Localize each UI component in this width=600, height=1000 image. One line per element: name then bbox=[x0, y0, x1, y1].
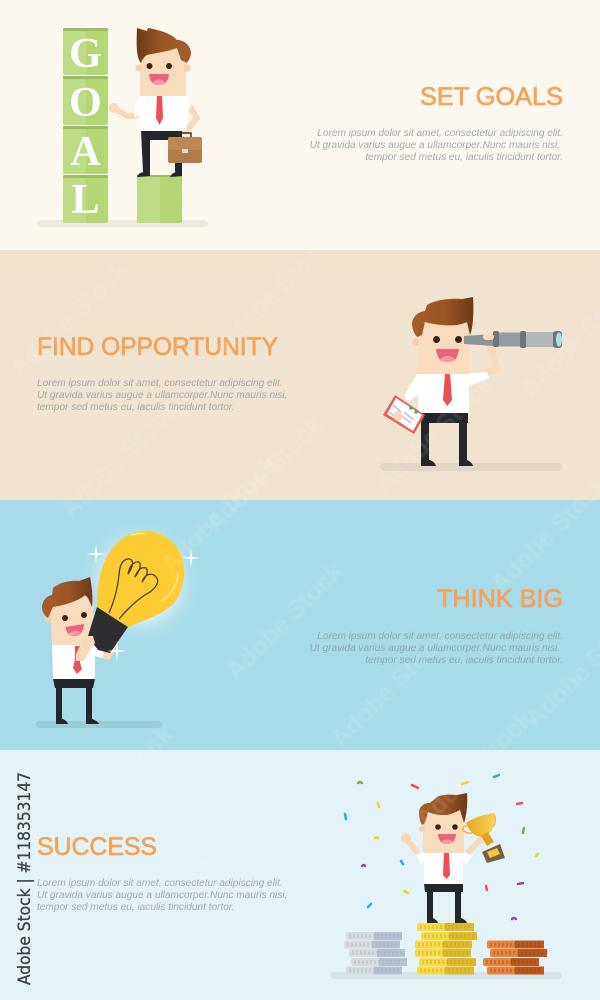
legs and shoes bbox=[137, 130, 182, 177]
illustration: businessman with trophy on coins bbox=[401, 793, 505, 923]
panel: find opportunity background bbox=[0, 250, 600, 500]
legs and shoes bbox=[53, 679, 99, 724]
head bbox=[412, 322, 469, 374]
hand on spyglass bbox=[483, 334, 494, 340]
heading: set goals: SET GOALS bbox=[420, 83, 563, 111]
text block: think big description: tempor sed metus eu, iaculis tincidunt tortor. bbox=[365, 655, 563, 666]
text block: success description: tempor sed metus eu, iaculis tincidunt tortor. bbox=[37, 902, 235, 913]
raised arm bbox=[470, 338, 497, 377]
bulb glass bbox=[97, 531, 184, 627]
block G: G bbox=[69, 31, 102, 77]
stock watermarks: Adobe Stock bbox=[325, 625, 453, 753]
bulb highlights bbox=[131, 534, 178, 601]
vertical stock id credit: Adobe Stock | #118353147 bbox=[15, 772, 35, 985]
clipboard bbox=[383, 395, 425, 434]
trophy bbox=[463, 813, 505, 863]
hand thumb up bbox=[109, 103, 119, 113]
holding hand bbox=[76, 636, 95, 661]
bulb socket bbox=[88, 607, 128, 653]
illustration: businessman with spyglass bbox=[383, 297, 562, 466]
legs and shoes bbox=[424, 884, 467, 923]
text block: set goals description: Ut gravida varius augue a ullamcorper.Nunc mauris nisi, bbox=[310, 140, 560, 151]
tie bbox=[156, 96, 163, 125]
text block: think big description: Ut gravida varius augue a ullamcorper.Nunc mauris nisi, bbox=[310, 643, 560, 654]
bulb glow bbox=[78, 520, 202, 644]
block under feet bbox=[137, 175, 182, 223]
illustration: gold coin stack bbox=[415, 923, 477, 974]
illustration: businessman on block with briefcase bbox=[109, 28, 202, 223]
ground shadow: find opportunity bbox=[380, 463, 562, 471]
block L: L bbox=[71, 177, 100, 223]
illustration: businessman holding light bulb bbox=[42, 520, 202, 724]
panel: success background bbox=[0, 750, 600, 1000]
tie bbox=[443, 373, 452, 406]
hair bbox=[137, 28, 191, 63]
arms bbox=[114, 107, 197, 132]
stock watermarks: Adobe Stock bbox=[220, 557, 348, 685]
ground shadow: set goals bbox=[37, 220, 208, 227]
stock watermarks: Adobe Stock bbox=[55, 395, 183, 523]
hair bbox=[42, 577, 92, 618]
block L bbox=[63, 175, 108, 223]
briefcase bbox=[168, 133, 202, 163]
block O: O bbox=[69, 80, 102, 126]
panel: think big background bbox=[0, 500, 600, 750]
stock watermarks: Adobe Stock bbox=[5, 255, 133, 383]
hair bbox=[419, 793, 467, 825]
far arm bbox=[95, 641, 116, 657]
head bbox=[419, 810, 464, 853]
illustration: silver coin stack bbox=[344, 932, 407, 974]
text block: set goals description bbox=[310, 128, 563, 163]
block A: A bbox=[70, 129, 101, 175]
heading: success: SUCCESS bbox=[37, 833, 157, 861]
panel: set goals background bbox=[0, 0, 600, 250]
sparkles bbox=[86, 544, 201, 661]
ground shadow: think big bbox=[36, 721, 162, 728]
arms bbox=[408, 838, 483, 852]
stock watermarks: Adobe Stock bbox=[155, 450, 283, 578]
stock watermarks: Adobe Stock bbox=[370, 370, 498, 498]
stock watermarks: Adobe Stock bbox=[210, 230, 338, 358]
illustration: copper coin stack bbox=[483, 940, 547, 974]
block G bbox=[63, 28, 108, 77]
stock watermarks: Adobe Stock bbox=[200, 410, 328, 538]
block O bbox=[63, 76, 108, 126]
block A bbox=[63, 126, 108, 175]
text block: success description: Lorem ipsum dolor sit amet, consectetur adipiscing elit. bbox=[37, 878, 283, 889]
shirt bbox=[134, 95, 191, 131]
spyglass bbox=[464, 331, 562, 348]
illustration: GOAL letter blocks bbox=[63, 28, 108, 223]
text block: success description: Ut gravida varius augue a ullamcorper.Nunc mauris nisi, bbox=[37, 890, 287, 901]
shirt bbox=[52, 645, 104, 679]
head bbox=[136, 46, 190, 96]
stock watermarks: Adobe Stock bbox=[410, 705, 538, 833]
shirt bbox=[416, 852, 472, 884]
text block: find opportunity description: Ut gravida varius augue a ullamcorper.Nunc mauris nisi, bbox=[37, 390, 287, 401]
head bbox=[44, 595, 96, 645]
text block: find opportunity description bbox=[37, 378, 287, 413]
stock watermarks: Adobe Stock bbox=[170, 90, 298, 218]
legs and shoes bbox=[421, 412, 473, 466]
stock watermarks: Adobe Stock bbox=[250, 875, 378, 1000]
text block: find opportunity description: Lorem ipsum dolor sit amet, consectetur adipiscing elit. bbox=[37, 378, 283, 389]
heading: find opportunity: FIND OPPORTUNITY bbox=[37, 333, 278, 361]
bulb filament bbox=[109, 559, 158, 619]
heading: think big: THINK BIG bbox=[437, 585, 563, 613]
illustration: confetti bbox=[345, 775, 538, 919]
tie bbox=[443, 853, 450, 879]
text block: find opportunity description: tempor sed metus eu, iaculis tincidunt tortor. bbox=[37, 402, 235, 413]
text block: set goals description: tempor sed metus eu, iaculis tincidunt tortor. bbox=[365, 152, 563, 163]
text block: think big description: Lorem ipsum dolor sit amet, consectetur adipiscing elit. bbox=[317, 631, 563, 642]
hair bbox=[412, 297, 473, 337]
stock watermarks: Adobe Stock bbox=[370, 80, 498, 208]
raised hand bbox=[401, 833, 411, 843]
stock watermarks: Adobe Stock bbox=[190, 755, 318, 883]
text block: success description bbox=[37, 878, 287, 913]
ground shadow: success bbox=[330, 972, 562, 979]
shirt bbox=[404, 372, 489, 413]
text block: set goals description: Lorem ipsum dolor sit amet, consectetur adipiscing elit. bbox=[317, 128, 563, 139]
tie bbox=[73, 646, 82, 674]
stock watermarks: Adobe Stock bbox=[50, 720, 178, 848]
text block: think big description bbox=[310, 631, 563, 666]
